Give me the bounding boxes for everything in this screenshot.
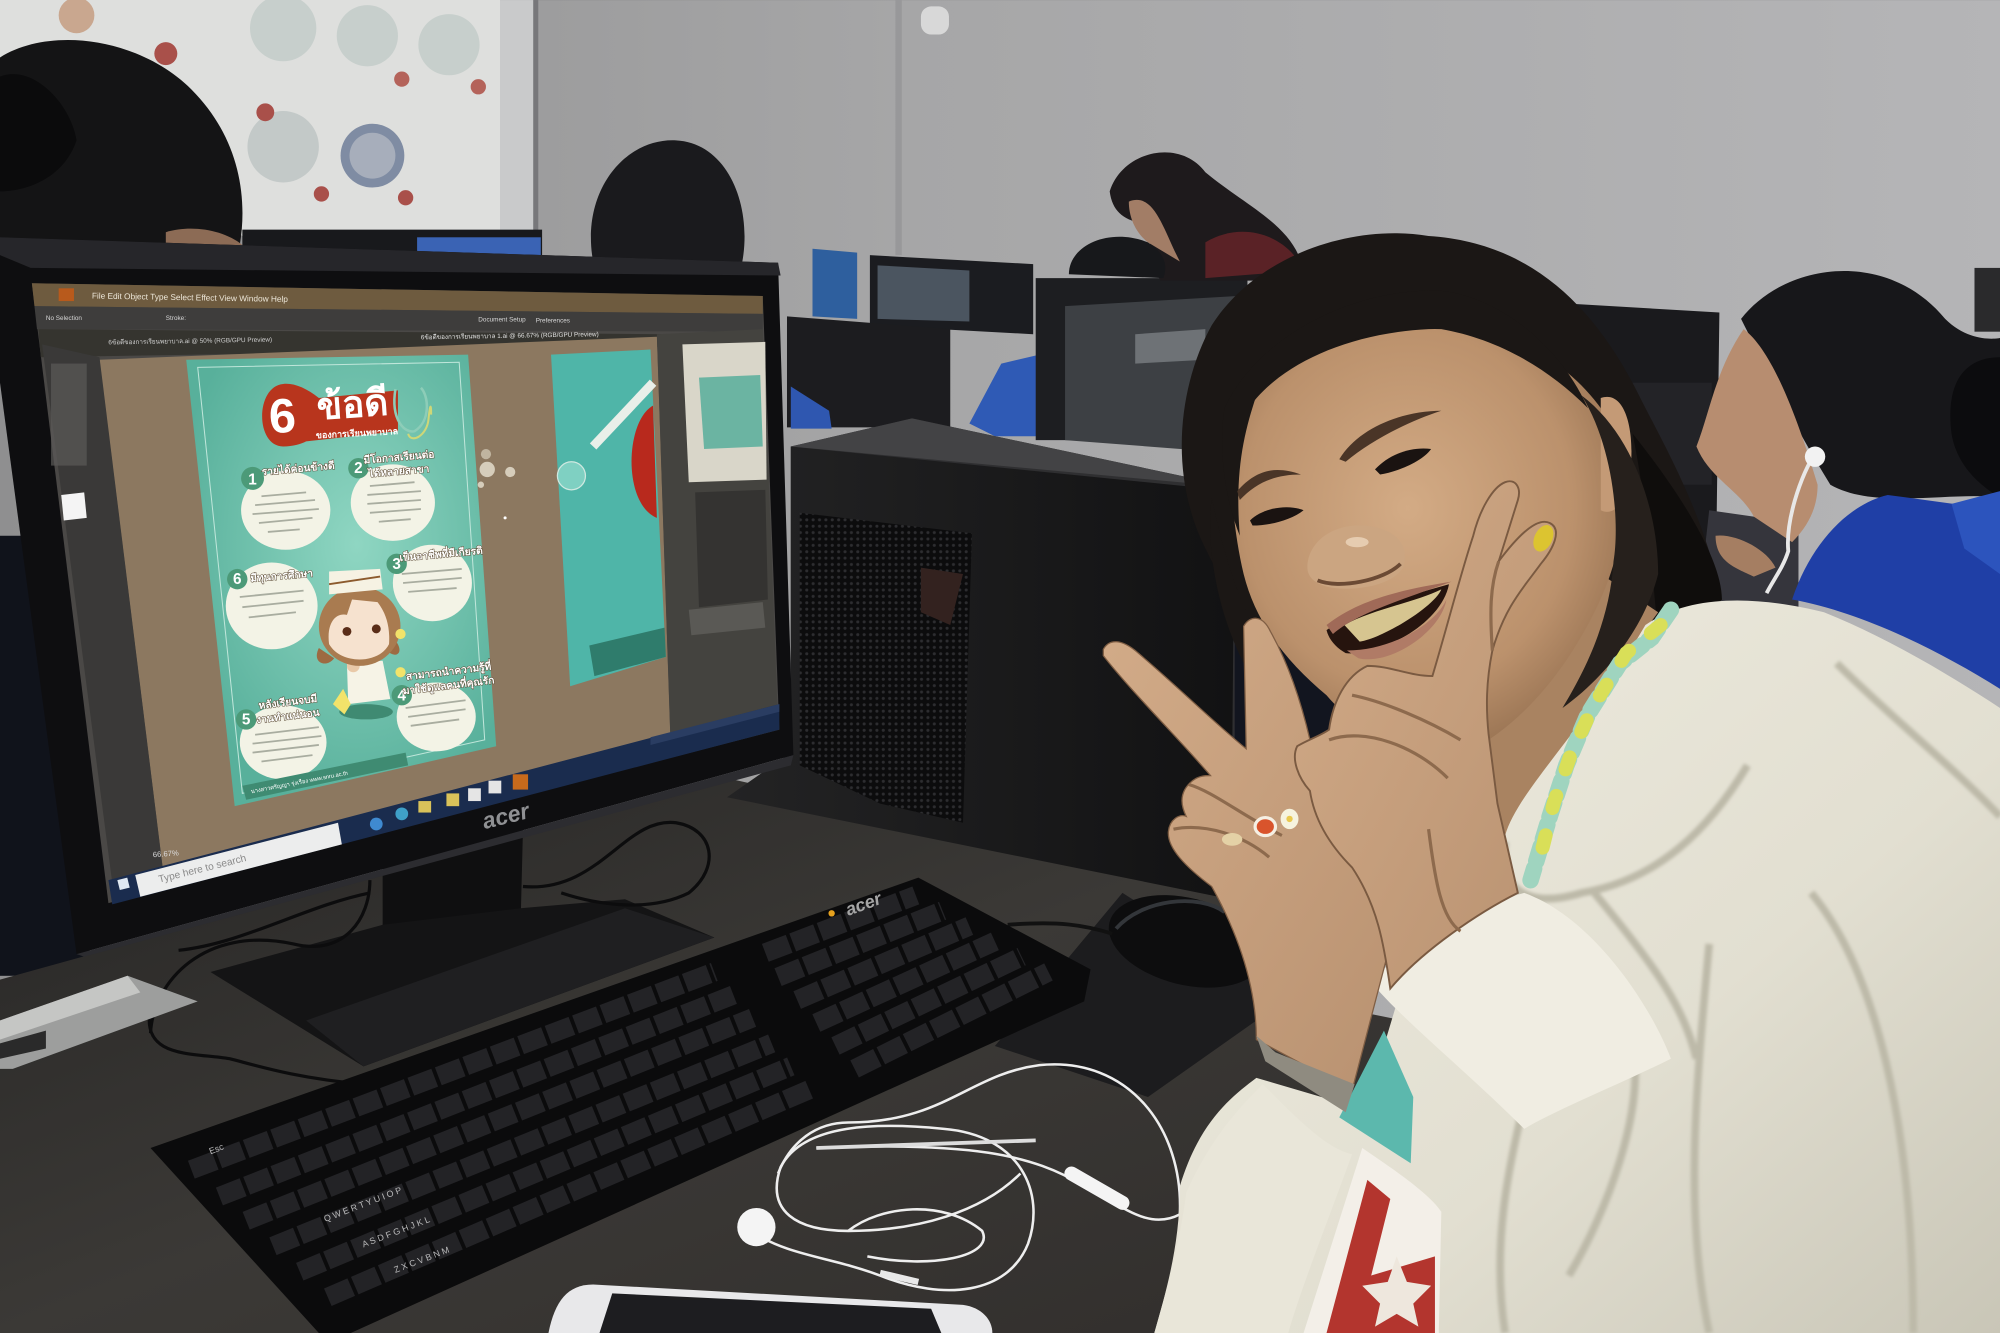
sweater body	[1154, 600, 2000, 1333]
badge numbers: 2	[354, 460, 363, 477]
benefit headings: งานทำแน่นอน	[256, 707, 320, 726]
smile and teeth	[1327, 582, 1452, 659]
poster footer bar: นางสาวศรัญญา รุ่งเรือง www.snru.ac.th	[250, 770, 348, 795]
poster: 6 benefits	[186, 355, 496, 806]
tab bar: 6ข้อดีของการเรียนพยาบาล 1.ai @ 66.67% (RGB/GPU Preview)	[421, 330, 599, 341]
monitor screen with Illustrator	[32, 283, 779, 904]
menu bar	[32, 283, 763, 314]
badge numbers: 4	[398, 687, 407, 704]
computer tower with mesh vent	[727, 418, 1235, 899]
poster title badge: ของการเรียนพยาบาล	[316, 426, 398, 440]
background student head, centre	[591, 140, 745, 262]
dark area at far left	[0, 536, 89, 976]
benefit circles	[226, 464, 476, 779]
projector screen showing infographic slide	[0, 0, 533, 236]
benefit headings: เป็นอาชีพที่มีเกียรติ	[399, 543, 484, 564]
monitor stand and base	[210, 829, 714, 1066]
badge numbers: 3	[392, 556, 401, 573]
white wired earphones	[737, 1064, 1180, 1290]
nose	[1307, 525, 1405, 589]
control bar	[34, 306, 763, 332]
desk surface	[0, 778, 1403, 1333]
tools panel	[42, 344, 163, 883]
keyboard brand: acer	[843, 888, 885, 920]
tab bar	[38, 329, 670, 357]
background student on the right with earphones	[1696, 268, 2000, 689]
benefit headings: ได้หลายสาขา	[367, 462, 430, 480]
key legends: Esc	[208, 1141, 226, 1156]
artboard canvas	[99, 337, 671, 872]
control bar: No Selection	[46, 315, 82, 322]
control bar: Stroke:	[166, 315, 186, 322]
monitor brand logo: acer	[480, 797, 533, 834]
key legends: A S D F G H J K L	[361, 1214, 431, 1249]
right side panels	[657, 329, 778, 753]
monitor bezel	[0, 237, 793, 957]
benefit headings	[250, 447, 495, 726]
benefit headings: สามารถนำความรู้ที่	[405, 659, 492, 684]
hair back	[1182, 233, 1722, 651]
face	[1231, 329, 1623, 756]
nurse character	[317, 569, 406, 719]
badge numbers: 6	[233, 571, 242, 588]
mouse pad and mouse	[995, 880, 1273, 1097]
number badges	[227, 458, 412, 730]
status bar: 66.67%	[153, 848, 179, 859]
benefit headings: มีโอกาสเรียนต่อ	[363, 447, 435, 467]
eyes	[1250, 448, 1431, 526]
benefit headings: รายได้ค่อนข้างดี	[261, 459, 336, 478]
key legends: Z X C V B N M	[393, 1245, 451, 1275]
eyebrows	[1237, 411, 1441, 500]
background student in red shirt	[1069, 152, 1304, 281]
beaded necklace	[1531, 610, 1671, 880]
background monitors and computers	[242, 230, 1798, 625]
poster footer bar	[242, 753, 408, 800]
red shirt print	[1304, 1148, 1441, 1333]
Windows taskbar	[108, 704, 779, 904]
stethoscope	[394, 388, 431, 438]
monitor cables	[149, 822, 709, 1084]
second poster on canvas	[551, 350, 666, 686]
background student head, top left	[0, 40, 242, 245]
student: smiling young woman	[1103, 233, 2000, 1333]
body text lines in circles	[240, 482, 466, 762]
poster title badge: 6	[267, 389, 297, 444]
badge numbers	[233, 460, 407, 729]
dark area behind the raised hands	[1212, 485, 1403, 969]
decorative bubbles on canvas	[478, 449, 515, 519]
tab bar: 6ข้อดีของการเรียนพยาบาล.ai @ 50% (RGB/GPU Preview)	[108, 336, 272, 346]
benefit headings: หลังเรียนจบมี	[258, 693, 318, 712]
key legends	[208, 1141, 451, 1275]
wristwatch	[1256, 1036, 1355, 1112]
left hand making a peace sign	[1103, 618, 1390, 1091]
poster title badge: ข้อดี	[315, 382, 390, 428]
poster title badge	[262, 382, 398, 446]
control bar: Document Setup	[478, 316, 526, 323]
keyboard key rows	[191, 895, 1048, 1297]
sweater folds and hood	[1500, 663, 2000, 1333]
hair fringe and side strands	[1222, 291, 1588, 536]
yellow smiley fingernail	[1529, 522, 1557, 555]
benefit headings: มีทุนการศึกษา	[250, 567, 314, 586]
badge numbers: 5	[242, 712, 251, 729]
benefit headings: มาใช้ดูแลคนที่คุณรัก	[402, 672, 495, 698]
right hand over the cheek	[1295, 481, 1556, 989]
keyboard	[151, 878, 1091, 1333]
key legends: Q W E R T Y U I O P	[322, 1185, 403, 1224]
painted nails	[1222, 809, 1298, 846]
Windows taskbar: Type here to search	[158, 853, 248, 886]
ear	[1601, 397, 1631, 512]
desk cable port	[0, 976, 198, 1069]
mask hanging at the neck	[1339, 1031, 1413, 1163]
badge numbers: 1	[248, 472, 257, 489]
neck	[1390, 561, 1658, 842]
smartphone	[548, 1284, 992, 1333]
menu bar: File Edit Object Type Select Effect View Window Help	[92, 291, 288, 304]
control bar: Preferences	[536, 318, 570, 325]
